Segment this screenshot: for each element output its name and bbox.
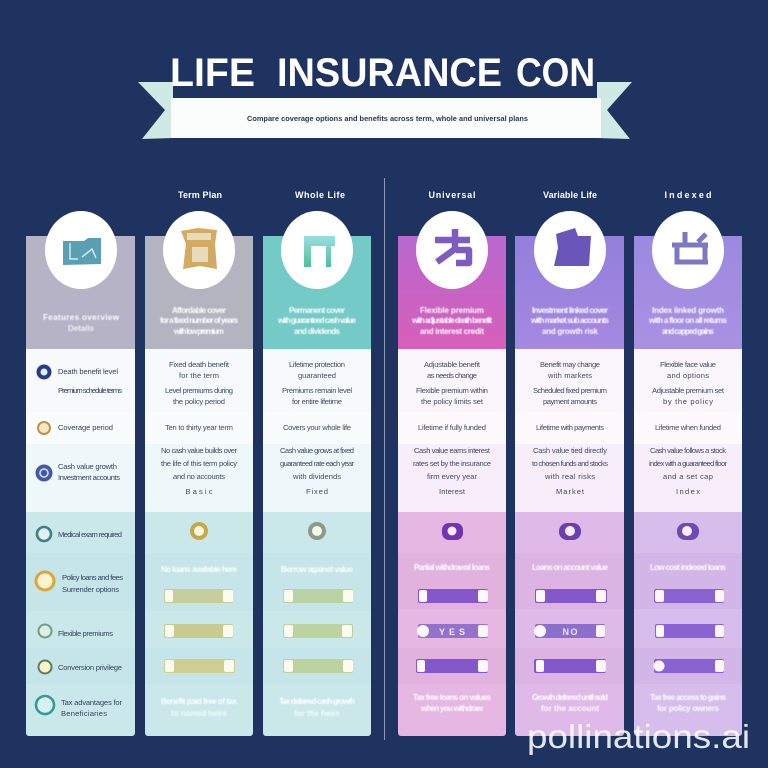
panel: features column — [26, 211, 135, 736]
panel: features column: Policy loans and fees — [62, 573, 123, 582]
panel: features column: Medical exam required — [58, 530, 122, 539]
panel: variable life column: Scheduled fixed premium — [533, 386, 607, 395]
panel: features column: Cash value growth — [58, 462, 117, 471]
panel: term plan column: with low premium — [173, 327, 224, 336]
icon: folder — [63, 238, 101, 265]
panel: term plan column: and no accounts — [173, 472, 225, 481]
panel: features column: Beneficiaries — [61, 709, 107, 718]
panel: term plan column: Level premiums during — [165, 386, 233, 395]
panel: term plan column: to named heirs — [171, 709, 228, 718]
bars — [654, 589, 724, 603]
panel: term plan column: Ten to thirty year term — [165, 423, 233, 432]
panel: features column: Surrender options — [62, 585, 119, 594]
panel: universal column: rates set by the insurance — [413, 459, 491, 468]
panel: variable life column: payment amounts — [543, 397, 597, 406]
loans text: Loans on account value — [532, 563, 609, 572]
icon: gold temple — [181, 228, 217, 269]
feature labels: Death benefit level — [58, 367, 118, 376]
panel: indexed column: Cash value follows a stock — [650, 446, 726, 455]
header text: Index linked growth — [652, 306, 724, 315]
panel: features column: Flexible premiums — [58, 629, 113, 638]
panel: features column: Investment accounts — [58, 473, 120, 482]
panel: term plan column: the life of this term policy — [161, 459, 237, 468]
icon detail — [187, 233, 211, 262]
circle badge — [534, 211, 606, 289]
panel: indexed column: with a floor on all returns — [648, 316, 728, 325]
panel: whole life column — [263, 211, 371, 736]
panel: indexed column: and capped gains — [662, 327, 715, 336]
column heading labels: Indexed — [664, 190, 712, 200]
ribbon band — [171, 98, 601, 138]
panel: whole life column: Cash value grows at fixed — [280, 446, 354, 455]
ribbon right tail — [597, 82, 632, 139]
panel: universal column: and interest credit — [420, 327, 484, 336]
header text: Affordable cover — [172, 306, 226, 315]
panel: indexed column: and a set cap — [663, 472, 713, 481]
header text: Permanent cover — [289, 306, 345, 315]
icon: purple glyph — [435, 229, 470, 263]
panel: features column: Premium schedule terms — [58, 386, 122, 395]
panel: indexed column: and options — [667, 371, 709, 380]
panel: universal column: when you withdraw — [420, 704, 484, 713]
panel: variable life column: Cash value tied directly — [533, 446, 607, 455]
panel: variable life column: to chosen funds and stocks — [532, 459, 608, 468]
bars — [535, 589, 607, 603]
body text: Adjustable benefit — [424, 360, 481, 369]
bar value: NO — [562, 627, 578, 637]
panel: whole life column: with guaranteed cash value — [277, 316, 357, 325]
title banner — [138, 51, 632, 139]
panel: term plan column: No cash value builds over — [161, 446, 237, 455]
panel: variable life column: for the account — [541, 704, 599, 713]
panel: indexed column: by the policy — [663, 397, 713, 406]
loans text: Partial withdrawal loans — [414, 563, 491, 572]
panel: whole life column: for the heirs — [294, 709, 341, 718]
icon marks — [70, 243, 96, 259]
circle badge — [281, 211, 353, 289]
medical exam marker — [190, 522, 208, 540]
panel: whole life column: guaranteed rate each year — [280, 459, 354, 468]
tax text: Tax free access to gains — [650, 693, 727, 702]
panel: universal column: Lifetime if fully funded — [418, 423, 486, 432]
loans text: Borrow against value — [281, 565, 354, 574]
ribbon left tail — [138, 82, 173, 139]
panel: features column: Tax advantages for — [61, 698, 122, 707]
panel: universal column: firm every year — [427, 472, 477, 481]
circle badge — [652, 211, 724, 289]
column heading labels: Variable Life — [543, 190, 597, 200]
panel: variable life column: Market — [556, 487, 585, 496]
bars — [164, 589, 233, 603]
column heading labels: Universal — [428, 190, 476, 200]
panel: indexed column: Lifetime when funded — [655, 423, 721, 432]
watermark: pollinations.ai — [527, 718, 750, 755]
bars — [418, 589, 488, 603]
panel: indexed column: for policy owners — [657, 704, 720, 713]
divider between column groups — [384, 178, 385, 740]
feature icons — [36, 364, 52, 380]
panel: term plan column — [145, 211, 253, 736]
column heading labels — [178, 190, 712, 200]
subtitle: Compare coverage options and benefits across term, whole and universal plans — [247, 114, 528, 123]
tax text: Growth deferred until sold — [532, 693, 608, 702]
medical exam marker — [308, 522, 326, 540]
icon: desk glyph — [672, 232, 708, 262]
panel: universal column — [398, 211, 506, 736]
panel: whole life column: guaranteed — [298, 371, 336, 380]
panel: whole life column: Fixed — [306, 487, 328, 496]
panel: variable life column: Lifetime with payments — [536, 423, 604, 432]
column heading labels: Whole Life — [295, 190, 345, 200]
panel: whole life column: Premiums remain level — [282, 386, 352, 395]
body text: Lifetime protection — [289, 360, 345, 369]
body text: Benefit may change — [540, 360, 600, 369]
icon: purple document — [554, 228, 591, 266]
panel: universal column: with adjustable death benefit — [411, 316, 492, 325]
panel: features column: Details — [68, 324, 95, 333]
panel: whole life column: with dividends — [292, 472, 341, 481]
panel: variable life column: with market sub accounts — [530, 316, 610, 325]
icon: teal arch — [304, 236, 335, 267]
panel: indexed column — [634, 211, 742, 736]
panel: variable life column: with markets — [547, 371, 592, 380]
panel: term plan column: the policy period — [173, 397, 225, 406]
title: CON — [516, 51, 595, 95]
panel: whole life column: for entire lifetime — [292, 397, 342, 406]
title: LIFE — [170, 51, 255, 95]
circle badge — [45, 211, 117, 289]
tax text: Tax free loans on values — [413, 693, 492, 702]
panel: variable life column — [515, 211, 624, 736]
panel: features column: Coverage period — [58, 423, 113, 432]
panel: universal column: the policy limits set — [421, 397, 484, 406]
header text: Investment linked cover — [532, 306, 608, 315]
panel: indexed column: index with a guaranteed floor — [649, 459, 727, 468]
panel: term plan column: for the term — [179, 371, 219, 380]
tax text: Tax deferred cash growth — [279, 697, 355, 706]
medical exam marker — [677, 523, 699, 540]
bars — [283, 589, 353, 603]
body text: Flexible face value — [660, 360, 716, 369]
circle badge — [416, 211, 488, 289]
body text: Fixed death benefit — [169, 360, 230, 369]
panel: universal column: Interest — [439, 487, 466, 496]
header text: Flexible premium — [420, 306, 484, 315]
circle badge — [163, 211, 235, 289]
bar value: YES — [439, 627, 465, 637]
panel: whole life column: and dividends — [294, 327, 341, 336]
panel: variable life column: and growth risk — [542, 327, 599, 336]
tax text: Benefit paid free of tax — [161, 697, 238, 706]
medical exam marker — [442, 523, 463, 540]
panel: variable life column: with real risks — [544, 472, 595, 481]
medical exam marker — [559, 523, 581, 540]
header text: Features overview — [43, 313, 120, 322]
loans text: No loans available here — [161, 565, 238, 574]
title: INSURANCE — [277, 51, 502, 95]
panel: universal column: Flexible premium within — [416, 386, 488, 395]
loans text: Low cost indexed loans — [650, 563, 727, 572]
panel: universal column: as needs change — [427, 371, 477, 380]
panel: term plan column: for a fixed number of years — [160, 316, 239, 325]
column heading labels: Term Plan — [178, 190, 222, 200]
panel: indexed column: Adjustable premium set — [652, 386, 725, 395]
panel: whole life column: Covers your whole life — [283, 423, 351, 432]
panel: indexed column: Index — [676, 487, 700, 496]
panel: universal column: Cash value earns interest — [414, 446, 491, 455]
panel: term plan column: Basic — [186, 487, 213, 496]
panel: features column: Conversion privilege — [58, 663, 122, 672]
